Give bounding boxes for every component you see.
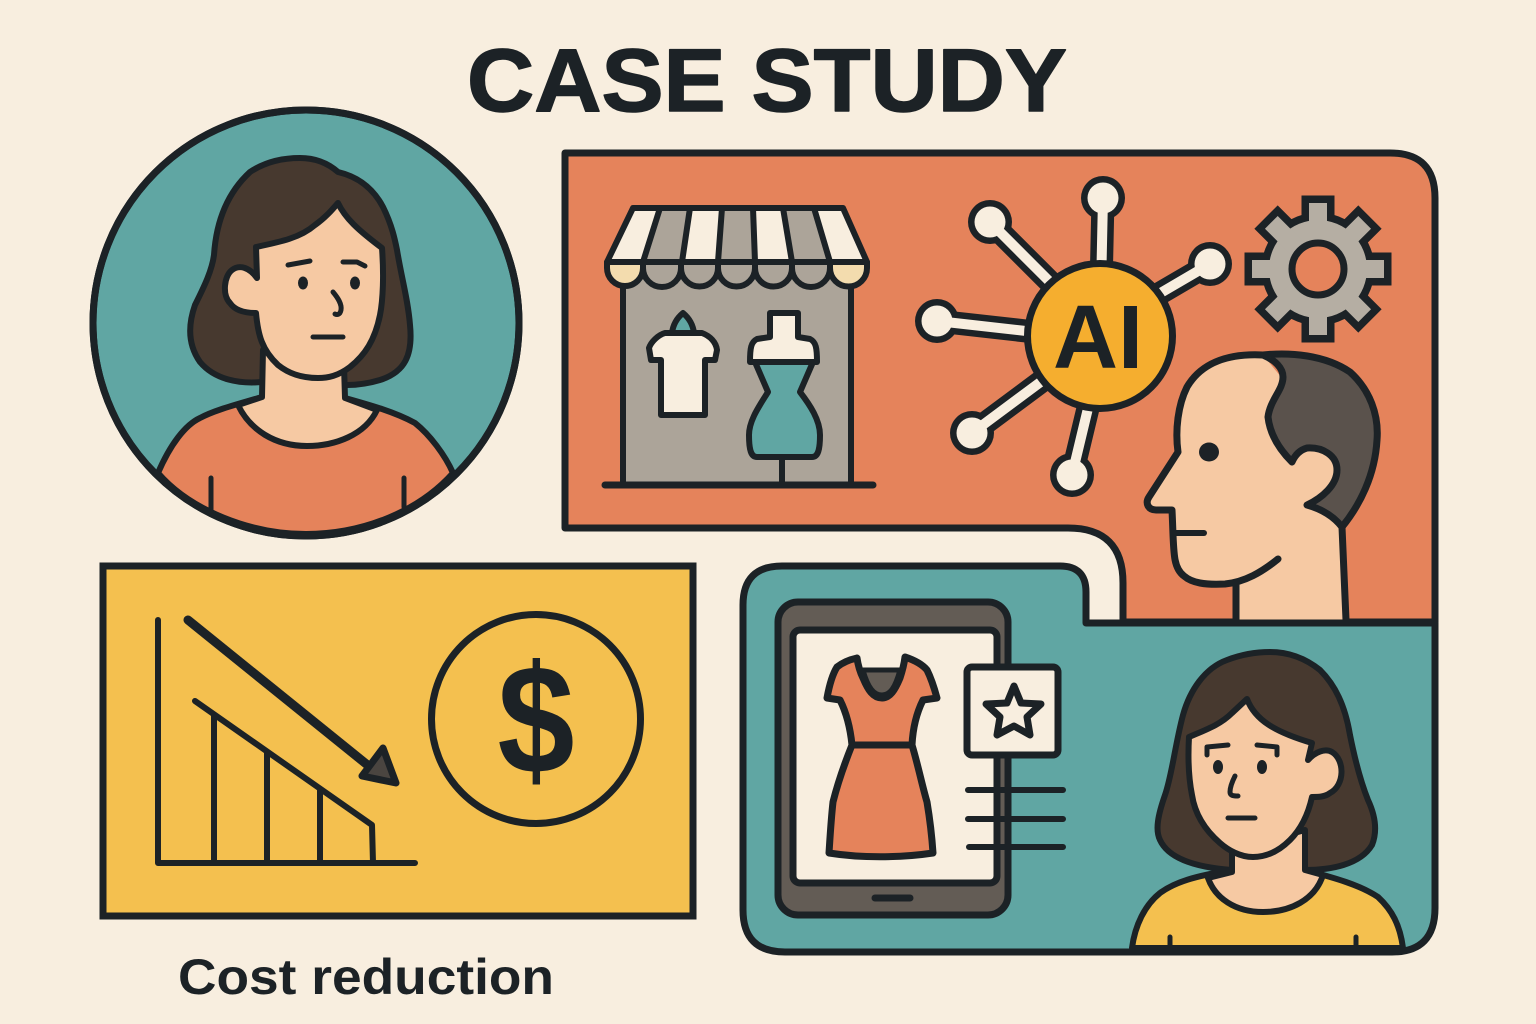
panel: teal shopper panel [743,566,1435,952]
panel: customer portrait [93,110,519,536]
shirt [158,397,453,534]
icon: dollar coin: $ [498,633,574,806]
text lines [968,790,1063,847]
panel: cost reduction [103,566,693,916]
icon: AI network hub [915,176,1232,497]
icon: clothing store [605,208,873,485]
face [225,203,383,378]
chart: declining bars [158,620,415,863]
caption: cost reduction: Cost reduction [178,949,554,1005]
icon: dollar coin [432,614,640,824]
hair [190,158,411,385]
rating card [967,667,1058,755]
title: CASE STUDY [467,30,1067,130]
dress [827,657,937,857]
neck [238,350,377,446]
icon: woman shopper [1132,652,1403,950]
icon: gear [1252,203,1384,335]
panel: orange AI store background [565,153,1435,622]
arrow: downward trend [188,620,396,783]
eyes, brows, nose, mouth [298,276,308,290]
icon: mannequin dress [750,313,817,362]
icon: bald man profile [1147,354,1377,622]
icon: tablet with dress [778,602,1063,915]
icon: shirt on hanger [672,313,694,333]
icon: AI network hub: AI [1053,288,1143,388]
